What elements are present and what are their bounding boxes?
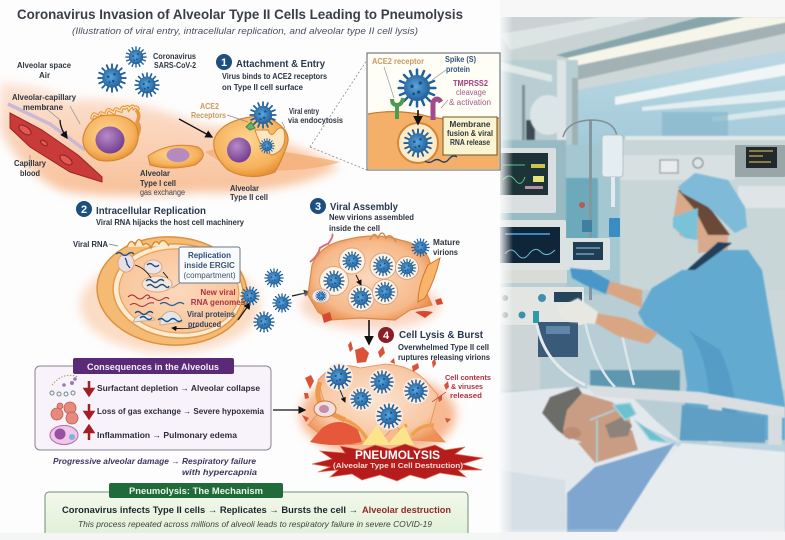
bed rail bbox=[585, 385, 785, 418]
panel: step 1 alveolar scene bbox=[0, 47, 340, 196]
label: TMPRSS2: cleavage bbox=[456, 88, 487, 97]
label: ACE2 receptors: ACE2 bbox=[200, 102, 219, 111]
vesicles with virions bbox=[312, 248, 418, 311]
icon: patient monitors and ventilator bbox=[497, 148, 634, 387]
row 3 text: Inflammation → Pulmonary edema bbox=[97, 430, 237, 440]
label: TMPRSS2: TMPRSS2 bbox=[453, 79, 488, 88]
row 3 arrow bbox=[85, 426, 93, 440]
label: TMPRSS2 bbox=[449, 79, 491, 107]
label: viral entry bbox=[288, 107, 343, 125]
photo left-edge fade bbox=[500, 17, 512, 532]
burst cell body bbox=[308, 364, 445, 445]
label: viral proteins bbox=[187, 310, 236, 329]
mechanism flow: Coronavirus infects Type II cells → Replicates → Bursts the cell → bbox=[62, 505, 358, 516]
step 1 description: on Type II cell surface bbox=[222, 83, 304, 92]
label: type I cell: gas exchange bbox=[140, 188, 185, 197]
panel header bbox=[73, 358, 234, 374]
burst virions bbox=[325, 363, 429, 430]
nurse neck bbox=[698, 230, 728, 253]
panel: pneumolysis the mechanism bbox=[45, 483, 468, 538]
label: type II cell bbox=[230, 184, 268, 202]
nurse cap bbox=[678, 173, 747, 233]
heading: step 3 viral assembly bbox=[310, 198, 414, 233]
label: type I cell: Type I cell bbox=[140, 179, 176, 188]
label: cell contents: released bbox=[450, 391, 482, 400]
badge 3: 3 bbox=[315, 201, 321, 213]
icon: surfactant bbox=[50, 375, 78, 396]
leader bbox=[432, 392, 446, 402]
mechanism flow: Alveolar destruction bbox=[362, 505, 451, 516]
callout: pneumolysis burst bbox=[312, 444, 483, 481]
label: viral entry: via endocytosis bbox=[288, 116, 343, 125]
free viruses bbox=[98, 47, 159, 97]
cell surface frills bbox=[310, 234, 332, 262]
title: Coronavirus Invasion of Alveolar Type II Cells Leading to Pneumolysis bbox=[17, 7, 463, 22]
label: type II cell: Type II cell bbox=[230, 193, 268, 202]
label: cell contents: Cell contents bbox=[445, 373, 491, 382]
label: capillary blood bbox=[14, 159, 47, 178]
glow bbox=[300, 280, 440, 330]
icon: inflammatory cell bbox=[50, 426, 78, 444]
label: membrane: membrane bbox=[23, 103, 64, 112]
figure: patient in bed bbox=[500, 385, 785, 535]
subtitle: (Illustration of viral entry, intracellular replication, and alveolar type II cell lysis) bbox=[72, 26, 418, 37]
nurse face and hair bbox=[673, 190, 707, 240]
panel header: Consequences in the Alveolus bbox=[87, 362, 219, 373]
row 1 text: Surfactant depletion → Alveolar collapse bbox=[97, 383, 260, 393]
nurse arms bbox=[605, 280, 642, 308]
badge 2 bbox=[76, 201, 92, 217]
label: spike protein: Spike (S) bbox=[445, 55, 476, 64]
viral RNA squiggle bbox=[425, 156, 457, 162]
step 4 title: Cell Lysis & Burst bbox=[399, 329, 483, 341]
new RNA squiggles bbox=[128, 295, 184, 306]
ACE2 receptor glyph bbox=[392, 98, 403, 119]
label: ACE2 receptors bbox=[191, 102, 226, 120]
label: spike protein bbox=[445, 55, 476, 74]
label: cell contents bbox=[445, 373, 491, 400]
panel: inset membrane fusion bbox=[367, 53, 500, 170]
heading: step 4 cell lysis and burst bbox=[378, 327, 491, 362]
step 1 description bbox=[222, 72, 328, 92]
patient neck bbox=[578, 430, 638, 463]
text block: progressive damage: Progressive alveolar damage → Respiratory failure bbox=[53, 456, 256, 466]
text block: progressive damage: with hypercapnia bbox=[182, 467, 257, 477]
alveolar type II cell with endocytosis bbox=[214, 116, 288, 177]
cell protrusion bbox=[418, 258, 440, 302]
panel: burst cell bbox=[300, 341, 491, 457]
label: new viral RNA genomes bbox=[191, 288, 246, 307]
step 3 description: New virions assembled bbox=[329, 213, 414, 222]
leader lines bbox=[30, 105, 285, 168]
label: mature virions: virions bbox=[433, 248, 459, 257]
inset leader lines bbox=[384, 67, 448, 108]
row 2 arrow bbox=[85, 404, 93, 418]
arrow: assembly to lysis bbox=[368, 320, 370, 344]
patient beard bbox=[605, 417, 632, 438]
photo backdrop: ICU room bbox=[498, 15, 785, 535]
label: membrane bbox=[12, 93, 77, 112]
mechanism header: Pneumolysis: The Mechanism bbox=[129, 486, 263, 497]
compartments with RNA bbox=[116, 252, 182, 325]
bottom fade over panel bbox=[0, 533, 500, 540]
label: ACE2 receptor: ACE2 receptor bbox=[372, 57, 424, 66]
leader bbox=[109, 244, 180, 288]
step 4 description: ruptures releasing virions bbox=[398, 353, 491, 362]
label: TMPRSS2: & activation bbox=[449, 98, 491, 107]
label: new viral RNA genomes: New viral bbox=[200, 288, 236, 297]
callout: pneumolysis burst: (Alveolar Type II Cell Destruction) bbox=[333, 461, 464, 470]
nurse scrubs bbox=[638, 250, 785, 440]
label: viral proteins: produced bbox=[188, 320, 221, 329]
alveolar type I cell bbox=[148, 145, 340, 170]
blanket bbox=[678, 442, 780, 452]
badge 1: 1 bbox=[221, 57, 227, 69]
step 3 title: Viral Assembly bbox=[330, 201, 398, 213]
membrane remnants bbox=[318, 382, 345, 420]
patient face bbox=[563, 392, 632, 443]
bed sheets and pillow bbox=[501, 386, 681, 526]
step 1 title: Attachment & Entry bbox=[236, 58, 325, 70]
step 2 title: Intracellular Replication bbox=[96, 205, 206, 217]
arrow: cell to released virions bbox=[238, 303, 250, 320]
label: capillary blood: blood bbox=[20, 169, 40, 178]
callout: membrane fusion: fusion & viral bbox=[447, 129, 493, 138]
label: new viral RNA genomes: RNA genomes bbox=[191, 298, 246, 307]
label: capillary blood: Capillary bbox=[14, 159, 47, 168]
callout: membrane fusion: Membrane bbox=[450, 120, 491, 129]
arrow inside burst bbox=[340, 390, 345, 402]
mature virion bbox=[412, 239, 429, 256]
inset vesicle with virus bbox=[398, 123, 438, 163]
callout: replication inside ERGIC: (compartment) bbox=[183, 271, 236, 280]
label: coronavirus: Coronavirus bbox=[153, 52, 196, 61]
label: type II cell: Alveolar bbox=[230, 184, 259, 193]
debris bbox=[302, 341, 451, 423]
callout: replication inside ERGIC: Replication bbox=[188, 251, 231, 260]
callout: replication inside ERGIC bbox=[179, 247, 240, 283]
label: ACE2 receptors: Receptors bbox=[191, 111, 226, 120]
tissue wash bbox=[0, 82, 340, 196]
row 1 arrow bbox=[85, 381, 93, 395]
TMPRSS2 glyph bbox=[433, 99, 441, 120]
label: coronavirus: SARS-CoV-2 bbox=[154, 61, 196, 70]
label: coronavirus bbox=[153, 52, 196, 70]
glow around cell bbox=[80, 257, 260, 353]
arrow to type II cell bbox=[179, 119, 212, 137]
inset arrow bbox=[417, 110, 419, 124]
mechanism note: This process repeated across millions of alveoli leads to respiratory failure in severe COVID-19 bbox=[78, 519, 432, 529]
arrow: consequences to pneumolysis bbox=[273, 409, 305, 411]
row 2 text: Loss of gas exchange → Severe hypoxemia bbox=[97, 406, 264, 416]
inset tissue bbox=[368, 112, 499, 170]
panel: replicating cell bbox=[73, 232, 260, 353]
stethoscope bbox=[687, 242, 732, 270]
icon: top-right wall monitor bbox=[735, 145, 785, 177]
label: viral proteins: Viral proteins bbox=[187, 310, 236, 319]
label: membrane: Alveolar-capillary bbox=[12, 93, 77, 102]
callout: replication inside ERGIC: inside ERGIC bbox=[184, 261, 235, 270]
label: spike protein: protein bbox=[446, 65, 470, 74]
red lower-left tissue bbox=[310, 422, 362, 445]
callout: membrane fusion: RNA release bbox=[450, 138, 490, 147]
zoom dashed lines bbox=[310, 60, 367, 170]
virus on receptor bbox=[250, 102, 276, 128]
capillary with red blood cells bbox=[8, 104, 102, 182]
badge 2: 2 bbox=[81, 204, 87, 216]
label: alveolar space bbox=[17, 61, 72, 80]
label: viral RNA: Viral RNA bbox=[73, 240, 108, 249]
text block: progressive damage bbox=[53, 456, 257, 477]
step 2 description: Viral RNA hijacks the host cell machinery bbox=[96, 218, 245, 227]
bottom band bbox=[0, 528, 785, 540]
patient hair bbox=[542, 387, 582, 440]
heading: step 1 attachment and entry bbox=[216, 54, 328, 92]
fragments bbox=[322, 298, 443, 323]
label: mature virions: Mature bbox=[433, 238, 461, 247]
label: cell contents: & viruses bbox=[451, 382, 483, 391]
step 3 description: inside the cell bbox=[329, 224, 380, 233]
arrow to membrane bbox=[60, 120, 67, 138]
arrow: virions to assembly bbox=[292, 292, 310, 296]
panel: assembling cell bbox=[300, 233, 461, 330]
alveolar type II cell, left bbox=[83, 106, 139, 161]
burst glow bbox=[300, 373, 456, 457]
damaged cell body bbox=[308, 236, 432, 320]
icon: gas exchange alveoli bbox=[51, 402, 78, 424]
oxygen mask and tubing bbox=[590, 403, 668, 462]
label: alveolar space: Alveolar space bbox=[17, 61, 72, 70]
label: alveolar space: Air bbox=[39, 71, 50, 80]
host cell bbox=[93, 232, 251, 350]
icon: IV pole and fluid bag bbox=[563, 120, 623, 300]
step 1 description: Virus binds to ACE2 receptors bbox=[222, 72, 328, 81]
endocytosed virus bbox=[260, 139, 274, 153]
patient ear bbox=[563, 427, 581, 439]
step 3 description bbox=[329, 213, 414, 233]
badge 4: 4 bbox=[383, 330, 390, 342]
hospital gown bbox=[567, 443, 675, 535]
label: mature virions bbox=[433, 238, 461, 257]
inset spike virus bbox=[399, 70, 435, 106]
figure: nurse bbox=[558, 173, 785, 440]
vesicle with nucleus bbox=[314, 401, 336, 417]
yellow burst centre bbox=[362, 425, 414, 445]
step 4 description: Overwhelmed Type II cell bbox=[398, 343, 489, 352]
label: type I cell: Alveolar bbox=[140, 169, 170, 178]
heading: step 2 intracellular replication bbox=[76, 201, 245, 227]
label: type I cell bbox=[140, 169, 185, 197]
label: viral entry: Viral entry bbox=[289, 107, 319, 116]
callout: membrane fusion bbox=[443, 117, 497, 155]
top-of-image strip bbox=[500, 0, 785, 17]
nurse gloves bbox=[570, 268, 610, 294]
step 4 description bbox=[398, 343, 491, 362]
arrows inside cell bbox=[135, 265, 198, 329]
mechanism header bbox=[109, 483, 283, 498]
arrows between vesicles bbox=[356, 275, 361, 285]
panel: consequences in the alveolus bbox=[35, 358, 271, 450]
released virions bbox=[241, 269, 291, 332]
callout: pneumolysis burst: PNEUMOLYSIS bbox=[355, 448, 440, 462]
photo: ICU nurse and ventilated patient bbox=[497, 15, 785, 535]
